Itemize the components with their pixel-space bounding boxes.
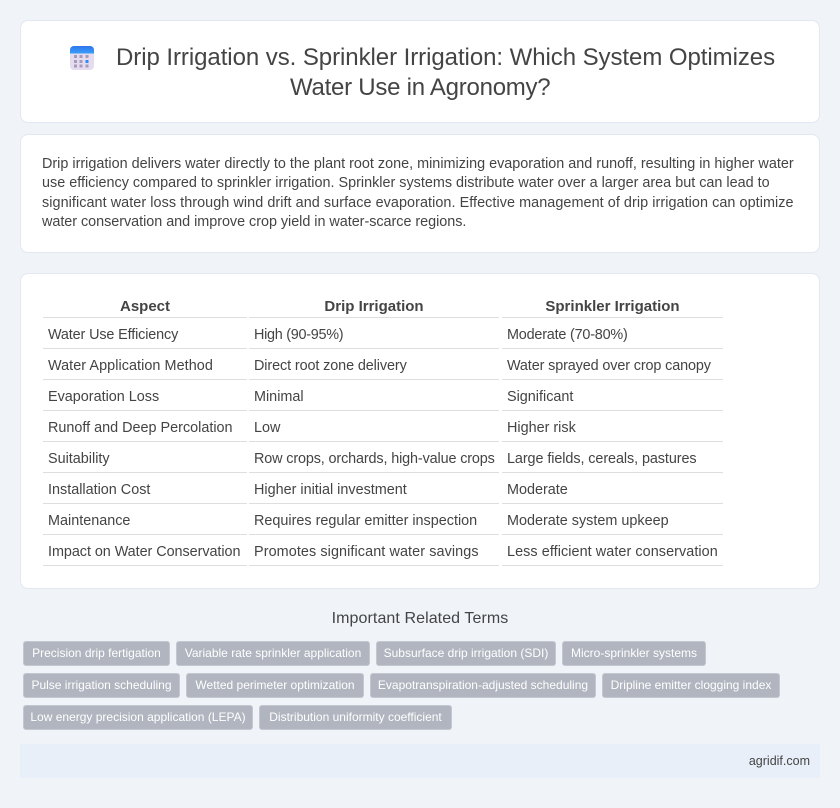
table rows: Minimal — [254, 389, 304, 405]
panel: title card — [20, 20, 820, 123]
tag list: related terms: Pulse irrigation scheduling — [31, 678, 172, 692]
title: Drip Irrigation vs. Sprinkler Irrigation: Which System Optimizes — [116, 44, 775, 71]
table rows: Moderate system upkeep — [507, 513, 669, 529]
tag list: related terms: Dripline emitter clogging index — [611, 678, 771, 692]
tag list: related terms: Evapotranspiration-adjusted scheduling — [378, 678, 588, 692]
text block: introduction: significant water loss through wind drift and surface evaporation. Effective management of drip irrigation can optimize — [42, 195, 794, 211]
tag list: related terms: Variable rate sprinkler application — [185, 646, 361, 660]
table rows: Promotes significant water savings — [254, 544, 479, 560]
title — [116, 44, 775, 101]
table rows: Installation Cost — [48, 482, 150, 498]
table rows: Suitability — [48, 451, 110, 467]
table rows: Large fields, cereals, pastures — [507, 451, 696, 467]
table rows: Requires regular emitter inspection — [254, 513, 477, 529]
text block: introduction: Drip irrigation delivers water directly to the plant root zone, minimizing evaporation and runoff, resulting in higher water — [42, 156, 794, 172]
table rows: Moderate (70-80%) — [507, 327, 628, 343]
table rows: Water Use Efficiency — [48, 327, 178, 343]
table rows — [43, 317, 723, 566]
table rows: Water sprayed over crop canopy — [507, 358, 711, 374]
table rows: Runoff and Deep Percolation — [48, 420, 233, 436]
table rows: Less efficient water conservation — [507, 544, 718, 560]
footer source text: agridif.com — [749, 754, 810, 768]
table header — [120, 298, 680, 315]
panel: comparison table — [20, 273, 820, 589]
text block: introduction — [42, 156, 794, 230]
table rows: Maintenance — [48, 513, 130, 529]
table header: Aspect — [120, 298, 170, 315]
table rows: Low — [254, 420, 280, 436]
comparison table — [43, 298, 723, 566]
tag list: related terms — [23, 641, 780, 730]
tag list: related terms: Wetted perimeter optimization — [195, 678, 355, 692]
table rows: Higher initial investment — [254, 482, 407, 498]
table rows: Evaporation Loss — [48, 389, 159, 405]
tag list: related terms: Micro-sprinkler systems — [571, 646, 697, 660]
table rows: Moderate — [507, 482, 568, 498]
table rows: High (90-95%) — [254, 327, 343, 343]
table rows: Significant — [507, 389, 573, 405]
title: Water Use in Agronomy? — [290, 74, 550, 101]
table rows: Direct root zone delivery — [254, 358, 407, 374]
tag list: related terms: Distribution uniformity coefficient — [269, 710, 442, 724]
heading: related terms: Important Related Terms — [332, 610, 508, 627]
table rows: Row crops, orchards, high-value crops — [254, 451, 495, 467]
tag list: related terms: Subsurface drip irrigation (SDI) — [384, 646, 548, 660]
table rows: Impact on Water Conservation — [48, 544, 240, 560]
tag list: related terms: Precision drip fertigation — [32, 646, 161, 660]
footer bar — [20, 744, 820, 778]
panel: introduction — [20, 134, 820, 253]
table rows: Water Application Method — [48, 358, 213, 374]
table header: Sprinkler Irrigation — [545, 298, 680, 315]
text block: introduction: water conservation and improve crop yield in water-scarce regions. — [42, 214, 466, 230]
icon: calendar grid — [70, 46, 94, 70]
tag list: related terms: Low energy precision application (LEPA) — [30, 710, 246, 724]
table header: Drip Irrigation — [324, 298, 424, 315]
text block: introduction: use efficiency compared to sprinkler irrigation. Sprinkler systems distribute water over a larger area but can lead to — [42, 175, 770, 191]
table rows: Higher risk — [507, 420, 576, 436]
